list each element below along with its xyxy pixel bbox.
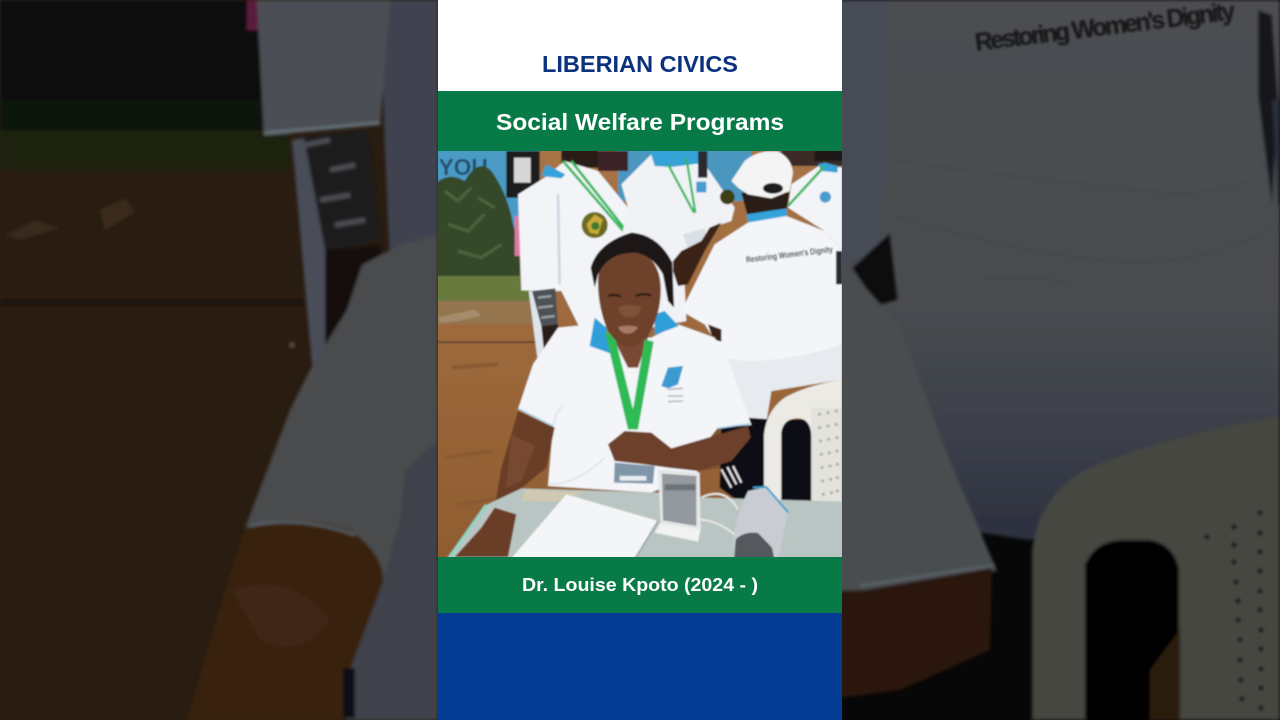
chair perforation dots: [1204, 510, 1264, 710]
person with white cap seen from behind: [681, 151, 842, 421]
background wall, bush and ground: [435, 148, 751, 504]
top right person: [781, 148, 845, 251]
right blurred background panel: [810, 0, 1280, 720]
title band: [438, 91, 842, 151]
seated woman in white polo shirt: [496, 232, 753, 500]
caption band: minister name: [438, 557, 842, 613]
photo: community health worker at table: [435, 148, 845, 560]
back person with patch and lanyard: [518, 148, 638, 358]
background wall, bush and ground: YOU: [439, 154, 488, 180]
heading: Liberian Civics: LIBERIAN CIVICS: [542, 51, 738, 77]
header band: [438, 0, 842, 91]
table with papers, blood pressure monitor and cuff: [448, 469, 845, 560]
distant person and crowd at the top: [506, 151, 628, 256]
title band: Social Welfare Programs: [496, 109, 784, 135]
white plastic chair: [764, 379, 842, 504]
back person with badge card: [620, 151, 736, 328]
dark trousers with white stripes: [698, 416, 811, 501]
person with white cap seen from behind: Restoring Women's Dignity: [745, 244, 833, 265]
footer blue band: [438, 613, 842, 720]
left blurred background panel: [0, 0, 438, 720]
caption band: minister name: Dr. Louise Kpoto (2024 - ): [522, 574, 758, 595]
